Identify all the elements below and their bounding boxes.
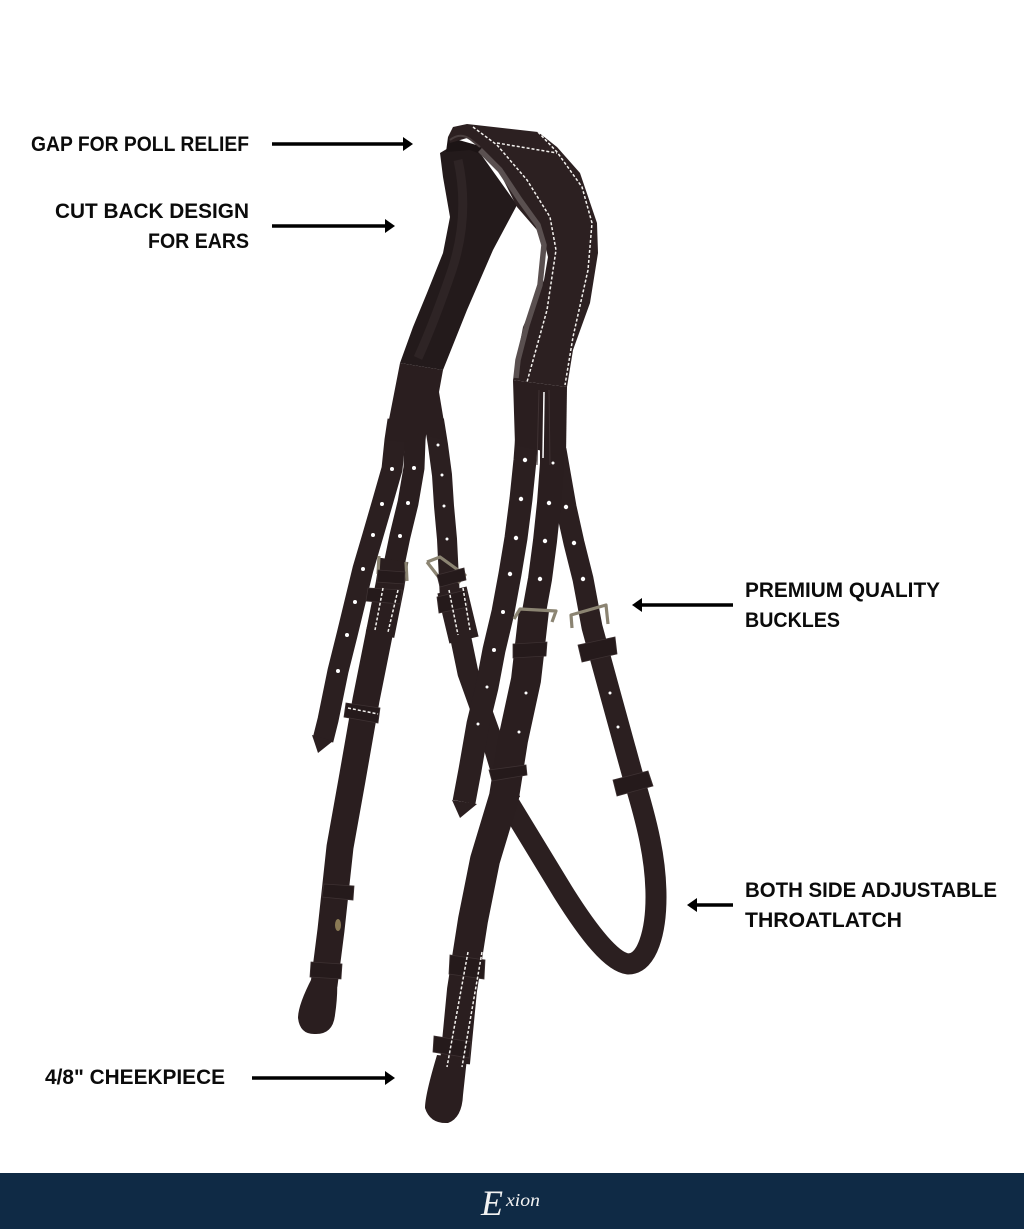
- left billet strap: [312, 420, 398, 753]
- arrow: to cheekpiece: [252, 1071, 395, 1085]
- dark gap at poll: [446, 137, 486, 156]
- label: premium quality buckles: BUCKLES: [745, 609, 840, 632]
- footer bar with logo: [0, 1173, 1024, 1229]
- arrow: to throatlatch: [687, 898, 733, 912]
- logo: Exion: xion: [505, 1190, 540, 1210]
- outer padded section: [448, 124, 598, 387]
- strap keepers: [310, 568, 653, 1058]
- right cheekpiece strap: [425, 420, 552, 1123]
- contrast stitching: [348, 127, 592, 1067]
- inner padded section: [400, 147, 517, 370]
- arrow: to poll gap: [272, 137, 413, 151]
- logo: Exion: E: [480, 1183, 503, 1223]
- strap holes: [336, 444, 620, 734]
- label: gap for poll relief: GAP FOR POLL RELIEF: [31, 133, 249, 156]
- logo: Exion: [480, 1183, 540, 1223]
- small stud: [335, 919, 341, 931]
- label: premium quality buckles: [745, 579, 940, 632]
- throatlatch strap and right strap: [434, 420, 656, 964]
- label: both side adjustable throatlatch: [745, 879, 997, 932]
- headpiece product illustration: [298, 124, 656, 1123]
- arrow: to buckles: [632, 598, 733, 612]
- label: both side adjustable throatlatch: THROATLATCH: [745, 909, 902, 932]
- label: cut back design for ears: [55, 200, 249, 253]
- right junction with slit: [513, 380, 567, 456]
- label: both side adjustable throatlatch: BOTH SIDE ADJUSTABLE: [745, 879, 997, 902]
- rolled piping: [480, 150, 544, 378]
- label: cheekpiece size: 4/8" CHEEKPIECE: [45, 1066, 225, 1089]
- label: premium quality buckles: PREMIUM QUALITY: [745, 579, 940, 602]
- left cheekpiece strap: [298, 420, 417, 1034]
- label: cut back design for ears: FOR EARS: [148, 230, 249, 253]
- label: cut back design for ears: CUT BACK DESIGN: [55, 200, 249, 223]
- left junction: [385, 363, 447, 442]
- arrow: to ear cut-out: [272, 219, 395, 233]
- metal buckles: [378, 556, 608, 628]
- right billet strap: [452, 420, 528, 818]
